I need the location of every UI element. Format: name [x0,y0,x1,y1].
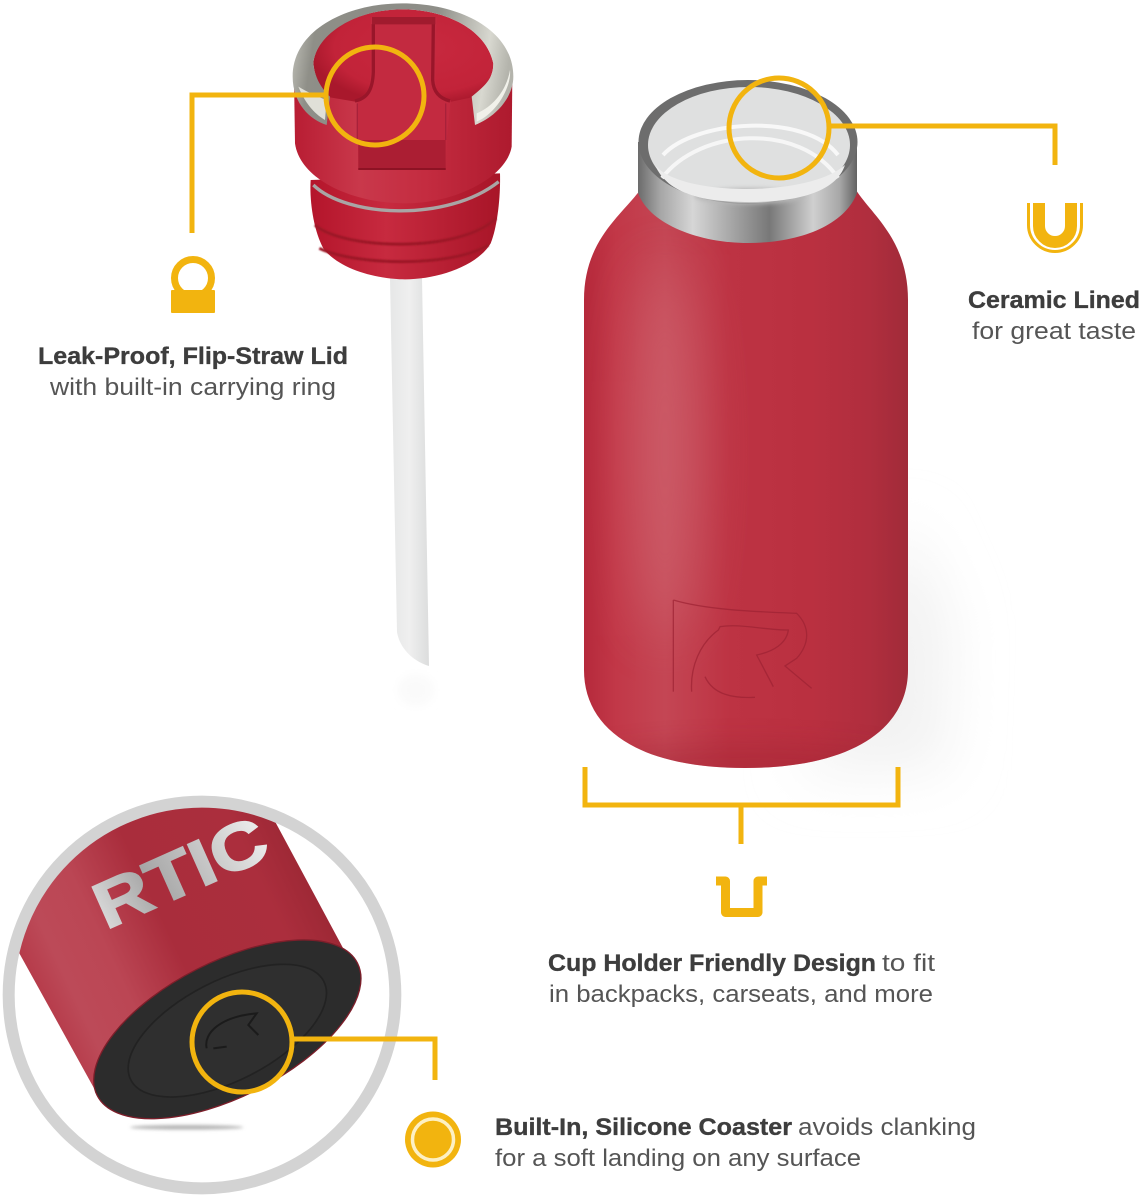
text: silicone coaster: for a soft landing on any surface [495,1145,861,1172]
bottle body [584,190,908,768]
icon: carrying ring lid [171,260,215,313]
text: silicone coaster: avoids clanking [798,1114,976,1141]
lid collar [294,77,512,203]
threaded lower lid [310,173,500,279]
coaster detail [0,783,395,1188]
silicone coaster [67,903,388,1156]
callout: ceramic liner [729,78,1055,178]
text: leak-proof lid: Leak-Proof, Flip-Straw Lid [38,343,348,370]
text: ceramic lined [968,287,1140,345]
silver rim [293,3,513,125]
icon: coaster [405,1112,461,1168]
callout: cup holder bracket [585,767,898,844]
lid cavity [313,9,493,102]
text: cup holder friendly [548,950,935,1008]
text: ceramic lined: Ceramic Lined [968,287,1140,314]
callout: coaster [192,992,435,1092]
text: silicone coaster: Built-In, Silicone Coaster [495,1114,792,1141]
icon: cup holder [716,881,767,912]
text: ceramic lined: for great taste [972,318,1136,345]
text: cup holder friendly: Cup Holder Friendly Design [548,950,876,977]
steel neck [638,142,857,243]
bottle [575,80,915,787]
embossed logo [673,600,812,697]
flip-straw lid [293,3,513,279]
ceramic interior [648,87,850,204]
text: leak-proof lid [38,343,348,401]
text: silicone coaster [495,1114,976,1172]
straw [390,278,434,706]
callout: lid [192,47,424,233]
text: cup holder friendly: in backpacks, carseats, and more [549,981,933,1008]
icon: ceramic lining cup [1028,203,1082,252]
grey magnifier ring [9,802,395,1188]
text: cup holder friendly: to fit [882,950,935,977]
bottle floor shadow [800,520,950,772]
RTIC logo: RTIC [82,802,279,943]
soft shadow [130,1125,243,1130]
rim [638,80,858,204]
text: leak-proof lid: with built-in carrying ring [49,374,336,401]
flip-straw channel [355,17,451,170]
magnified bottle base [19,808,343,1088]
